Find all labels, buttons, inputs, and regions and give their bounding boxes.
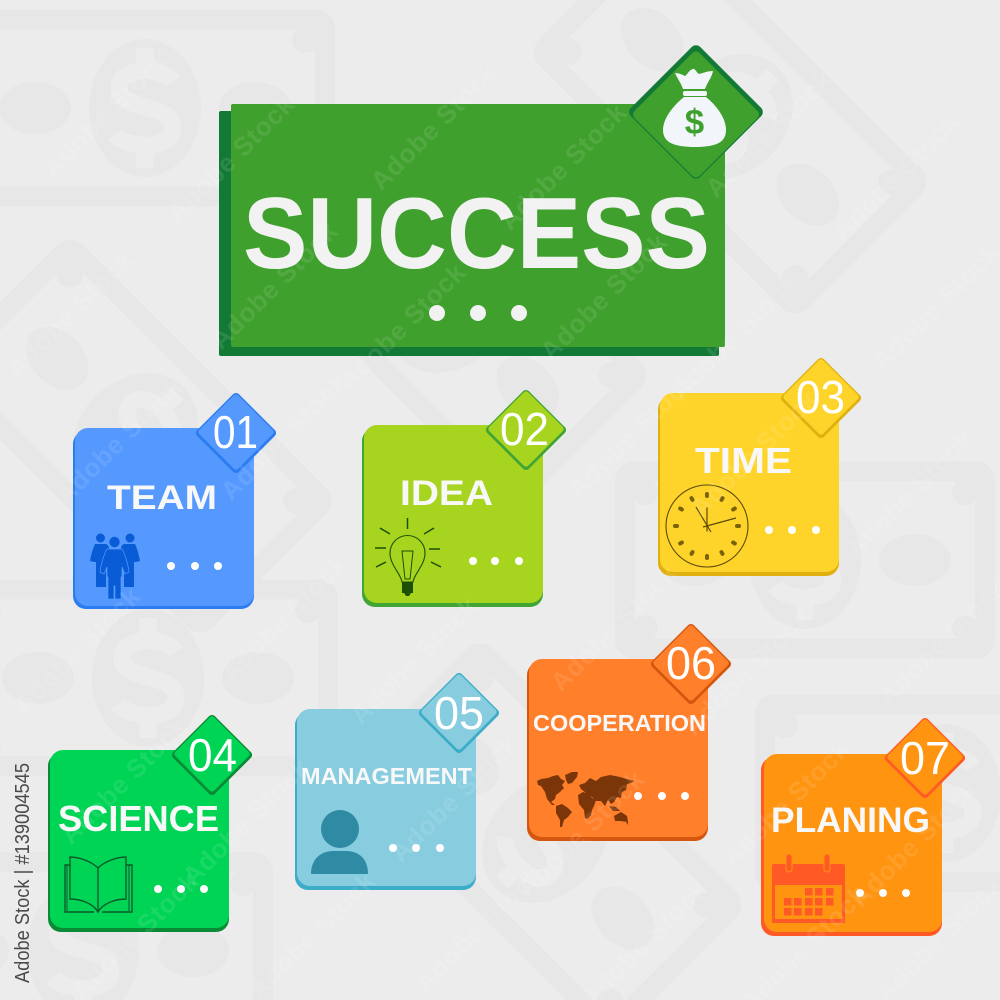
watermark overlay: Adobe Stock bbox=[511, 764, 650, 903]
icon: clock bbox=[666, 485, 748, 567]
icon: light bulb bbox=[375, 518, 441, 596]
label: COOPERATION bbox=[533, 710, 706, 736]
three dots bbox=[765, 526, 820, 534]
watermark overlay: Adobe Stock bbox=[562, 365, 701, 504]
badge 03: 03 bbox=[796, 371, 845, 423]
label: IDEA bbox=[400, 474, 493, 513]
money bag badge: $ bbox=[685, 103, 704, 142]
card 02: IDEA bbox=[362, 388, 568, 607]
three dots bbox=[154, 885, 208, 893]
badge 03 bbox=[779, 356, 863, 440]
three dots bbox=[856, 889, 910, 897]
label: TEAM bbox=[107, 479, 217, 517]
icon: open book bbox=[65, 857, 132, 912]
three dots bbox=[429, 305, 527, 321]
banner shadow bbox=[219, 111, 719, 356]
icon: person bbox=[311, 810, 368, 874]
card 06: COOPERATION bbox=[527, 622, 733, 841]
watermark overlay: Adobe Stock bbox=[364, 57, 503, 196]
main banner: SUCCESS bbox=[219, 43, 765, 356]
icon: world map bbox=[537, 772, 634, 827]
label: PLANING bbox=[771, 801, 930, 840]
title: SUCCESS bbox=[243, 178, 710, 290]
watermark overlay: Adobe Stock bbox=[344, 591, 483, 730]
watermark overlay: Adobe Stock bbox=[493, 97, 632, 236]
watermark overlay: Adobe Stock bbox=[0, 244, 139, 383]
card 05: MANAGEMENT bbox=[295, 671, 501, 890]
label: SCIENCE bbox=[58, 798, 219, 839]
label: MANAGEMENT bbox=[301, 763, 472, 789]
card 04: SCIENCE bbox=[48, 713, 254, 932]
badge 07: 07 bbox=[900, 732, 950, 784]
watermark overlay: Adobe Stock bbox=[176, 752, 315, 891]
badge 05: 05 bbox=[434, 687, 484, 739]
badge 05 bbox=[417, 671, 501, 755]
badge 01 bbox=[194, 391, 278, 475]
watermark overlay: Adobe Stock bbox=[844, 774, 983, 913]
three dots bbox=[634, 792, 689, 800]
watermark overlay: Adobe Stock bbox=[54, 711, 193, 850]
badge 06 bbox=[649, 622, 733, 706]
card 03: TIME bbox=[658, 356, 863, 576]
watermark overlay: Adobe Stock bbox=[826, 107, 965, 246]
watermark overlay: Adobe Stock bbox=[214, 549, 353, 688]
three dots bbox=[167, 562, 222, 570]
badge 04: 04 bbox=[188, 729, 237, 781]
three dots bbox=[469, 557, 523, 565]
badge 02: 02 bbox=[500, 403, 549, 455]
watermark overlay: Adobe Stock bbox=[384, 729, 523, 868]
label: TIME bbox=[695, 440, 792, 481]
watermark overlay: Adobe Stock bbox=[664, 267, 803, 406]
icon: team bbox=[90, 534, 140, 599]
watermark overlay: Adobe Stock bbox=[677, 602, 816, 741]
watermark overlay: Adobe Stock bbox=[684, 384, 823, 523]
watermark overlay: Adobe Stock bbox=[7, 581, 146, 720]
watermark overlay: Adobe Stock bbox=[204, 216, 343, 355]
badge 06: 06 bbox=[666, 637, 716, 689]
watermark overlay: Adobe Stock bbox=[49, 371, 188, 510]
three dots bbox=[389, 844, 444, 852]
card 07: PLANING bbox=[761, 716, 967, 936]
watermark overlay: Adobe Stock bbox=[409, 859, 548, 998]
card 01: TEAM bbox=[73, 391, 278, 609]
badge 01: 01 bbox=[213, 406, 258, 458]
watermark overlay: Adobe Stock bbox=[544, 558, 683, 697]
money bag badge bbox=[627, 43, 765, 181]
watermark overlay: Adobe Stock bbox=[214, 367, 353, 506]
watermark overlay: Adobe Stock bbox=[839, 424, 978, 563]
watermark overlay: Adobe Stock bbox=[534, 227, 673, 366]
badge 07 bbox=[883, 716, 967, 800]
icon: calendar bbox=[772, 854, 845, 923]
watermark overlay: Adobe Stock bbox=[161, 89, 300, 228]
badge 04 bbox=[170, 713, 254, 797]
watermark overlay: Adobe Stock bbox=[699, 64, 838, 203]
vertical stock credit: Adobe Stock | #139004545 bbox=[12, 763, 34, 983]
badge 02 bbox=[484, 388, 568, 472]
watermark overlay: Adobe Stock bbox=[36, 44, 175, 183]
watermark overlay: Adobe Stock bbox=[716, 734, 855, 873]
banner panel bbox=[231, 104, 725, 347]
watermark overlay: Adobe Stock bbox=[332, 257, 471, 396]
